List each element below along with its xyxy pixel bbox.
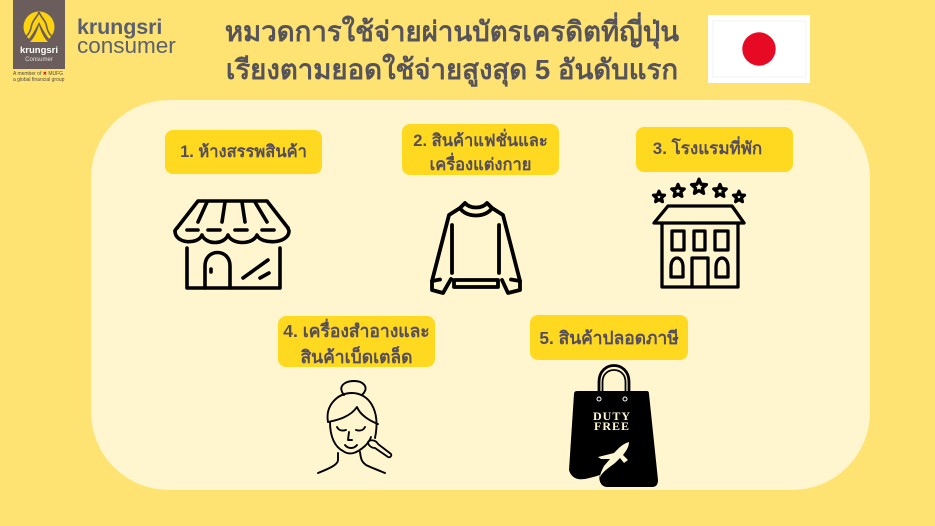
label: cosmetics (278, 316, 435, 367)
bag body (569, 391, 658, 487)
label: cosmetics: สินค้าเบ็ดเตล็ด (300, 346, 413, 366)
label: hotels (636, 127, 793, 172)
bag handle (599, 366, 629, 394)
label: department store (165, 130, 322, 174)
label: department store: 1. ห้างสรรพสินค้า (180, 143, 307, 161)
label: hotels: 3. โรงแรมที่พัก (653, 138, 762, 158)
title: เรียงตามยอดใช้จ่ายสูงสุด 5 อันดับแรก (226, 54, 678, 84)
label: fashion: 2. สินค้าแฟชั่นและ (413, 132, 548, 150)
logo: krungsri consumer (13, 0, 176, 83)
icon: woman applying makeup (317, 380, 392, 474)
logo: krungsri consumer: consumer (77, 33, 176, 58)
stars (653, 179, 745, 202)
logo panel with emblem: krungsri (20, 45, 58, 56)
icon: storefront (173, 199, 291, 290)
label: duty free (530, 315, 688, 360)
icon: duty free bag: FREE (594, 419, 630, 433)
MUFG tagline (13, 71, 64, 83)
duty free text: DUTY (593, 409, 631, 423)
airplane (598, 442, 629, 477)
panel: categories (91, 100, 870, 490)
icon: Japan flag (708, 15, 810, 83)
title (225, 12, 679, 87)
title: หมวดการใช้จ่ายผ่านบัตรเครดิตที่ญี่ปุ่น (225, 16, 679, 47)
logo panel with emblem (13, 0, 65, 69)
logo panel with emblem: Consumer (25, 57, 53, 63)
label: fashion (402, 124, 559, 175)
icon: sweater (430, 201, 522, 295)
label: cosmetics: 4. เครื่องสำอางและ (283, 320, 430, 340)
MUFG tagline: a global financial group (13, 77, 64, 83)
icon: hotel (652, 178, 746, 289)
brand wordmark: krungsri (77, 15, 162, 39)
MUFG tagline: A member of ✖ MUFG (13, 71, 63, 77)
label: duty free: 5. สินค้าปลอดภาษี (539, 328, 679, 348)
icon: duty free bag (569, 364, 658, 487)
label: fashion: เครื่องแต่งกาย (430, 156, 531, 174)
